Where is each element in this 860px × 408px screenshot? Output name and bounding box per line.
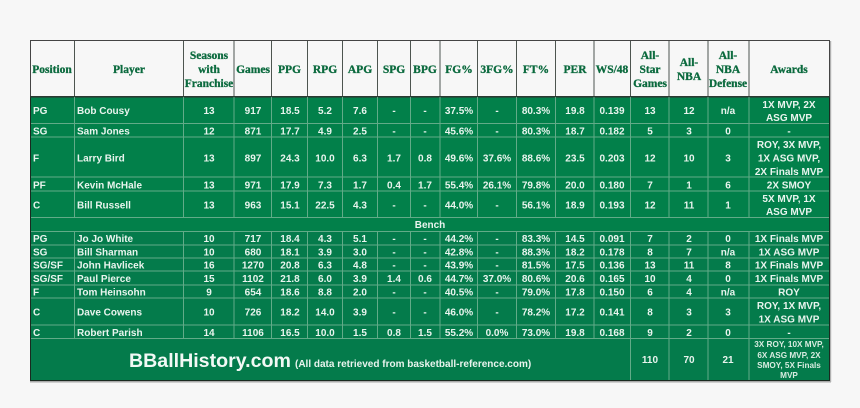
footer: totals: SMOY, 5X Finals	[757, 361, 821, 370]
header row: All-	[680, 57, 698, 69]
row: Larry Bird: 1.7	[387, 154, 401, 164]
footer: totals	[642, 340, 824, 380]
row: Sam Jones: 80.3%	[522, 126, 550, 138]
row: Jo Jo White: 0.091	[599, 234, 625, 245]
row: Dave Cowens: Dave Cowens	[77, 308, 142, 318]
row: Tom Heinsohn: 40.5%	[445, 288, 473, 298]
row: Tom Heinsohn: -	[423, 288, 427, 298]
row: Robert Parish: 0.0%	[486, 328, 509, 339]
row: Dave Cowens	[33, 301, 821, 326]
row: Sam Jones: -	[423, 126, 427, 138]
row: Dave Cowens: 18.2	[280, 308, 300, 318]
header row: Games	[236, 64, 270, 76]
row: Robert Parish: 1.5	[353, 328, 367, 339]
row: Bob Cousy: 13	[644, 106, 656, 117]
header row: Player	[113, 64, 145, 76]
row: John Havlicek: John Havlicek	[77, 260, 145, 272]
row: Jo Jo White: 18.4	[280, 234, 300, 245]
header row: with	[198, 64, 220, 76]
header row: BPG	[413, 64, 437, 76]
row: John Havlicek: 0.136	[599, 260, 625, 272]
row: Bob Cousy: 0.139	[599, 106, 625, 117]
row: Larry Bird: 24.3	[280, 154, 300, 164]
row: Larry Bird: 88.6%	[522, 154, 550, 164]
row: Robert Parish: 73.0%	[522, 328, 550, 339]
row: Kevin McHale: 20.0	[565, 180, 585, 192]
row: Paul Pierce: 6.0	[318, 274, 332, 285]
footer: totals: 21	[722, 355, 734, 366]
row: Larry Bird: 10	[683, 154, 695, 164]
row: Bill Sharman: 8	[647, 248, 653, 258]
header row: PPG	[278, 64, 301, 76]
table header band	[30, 40, 830, 96]
row: Robert Parish: 2	[686, 328, 692, 339]
header row: PER	[564, 64, 587, 76]
row: Bob Cousy: 1X MVP, 2X	[762, 100, 816, 111]
row: Robert Parish: 14	[203, 328, 215, 339]
row: Bob Cousy: -	[495, 106, 499, 117]
row: Paul Pierce: 10	[644, 274, 656, 285]
row: Bob Cousy: 19.8	[565, 106, 585, 117]
row: Bill Russell	[33, 194, 816, 218]
header row: APG	[348, 64, 372, 76]
row: Bill Russell: C	[33, 200, 40, 212]
row: Tom Heinsohn: n/a	[721, 288, 736, 298]
row: Jo Jo White: -	[392, 234, 396, 245]
row: Sam Jones: 5	[647, 126, 653, 138]
row: Dave Cowens: 46.0%	[445, 308, 473, 318]
row: Bill Russell: 13	[203, 200, 215, 212]
row: Dave Cowens: 78.2%	[522, 308, 550, 318]
row: Sam Jones: 17.7	[280, 126, 300, 138]
row: Sam Jones: -	[495, 126, 499, 138]
header row	[32, 50, 808, 90]
row: Bill Sharman: 1X ASG MVP	[759, 248, 820, 258]
row: Bob Cousy	[33, 100, 816, 124]
header row: Position	[32, 64, 72, 76]
row: Bill Sharman: 3.0	[353, 248, 367, 258]
row: Bill Sharman: 10	[203, 248, 215, 258]
row: Jo Jo White: 7	[647, 234, 653, 245]
row: Kevin McHale: 2X SMOY	[767, 180, 812, 192]
row: Dave Cowens: 8	[647, 308, 653, 318]
row: Jo Jo White: 83.3%	[522, 234, 550, 245]
row: Sam Jones: 45.6%	[445, 126, 473, 138]
row: Paul Pierce: 44.7%	[445, 274, 473, 285]
row: Jo Jo White: 1X Finals MVP	[755, 234, 824, 245]
row: Tom Heinsohn: 6	[647, 288, 653, 298]
row: Paul Pierce: 4	[686, 274, 692, 285]
row: Tom Heinsohn: 17.8	[565, 288, 585, 298]
row: Paul Pierce: 3.9	[353, 274, 367, 285]
row: John Havlicek: 17.5	[565, 260, 585, 272]
row: Kevin McHale: 7.3	[318, 180, 332, 192]
row: Bob Cousy: n/a	[721, 106, 736, 117]
row: Larry Bird: Larry Bird	[77, 154, 125, 164]
row: Bill Sharman: 18.1	[280, 248, 300, 258]
header row: Games	[633, 78, 667, 90]
row: Jo Jo White: -	[495, 234, 499, 245]
row: Sam Jones: 3	[686, 126, 692, 138]
row: Paul Pierce: 1102	[242, 274, 264, 285]
row: Robert Parish: 0.8	[387, 328, 401, 339]
row: Bill Russell: -	[392, 200, 396, 212]
footer: site name and data source	[129, 350, 531, 372]
row: Kevin McHale: 7	[647, 180, 653, 192]
section label: Bench: Bench	[415, 220, 445, 231]
row: Dave Cowens: ROY, 1X MVP,	[757, 301, 821, 312]
row: Tom Heinsohn: 18.6	[280, 288, 300, 298]
row: Dave Cowens: 3	[725, 308, 731, 318]
row: Paul Pierce: 0.6	[418, 274, 432, 285]
row: Robert Parish: 19.8	[565, 328, 585, 339]
row: Sam Jones: 871	[245, 126, 262, 138]
row: Bob Cousy: 917	[245, 106, 262, 117]
row: Paul Pierce: 0	[725, 274, 731, 285]
header row: All-	[719, 50, 737, 62]
row: Larry Bird: 897	[245, 154, 262, 164]
row: Jo Jo White: -	[423, 234, 427, 245]
header row: NBA	[716, 64, 741, 76]
row: Bob Cousy: 7.6	[353, 106, 367, 117]
row: Tom Heinsohn: 9	[206, 288, 212, 298]
row: Bill Russell: 5X MVP, 1X	[762, 194, 816, 205]
row: Larry Bird: 10.0	[315, 154, 335, 164]
row: Dave Cowens: 17.2	[565, 308, 585, 318]
row: Larry Bird: 12	[644, 154, 656, 164]
header row: 3FG%	[480, 64, 514, 76]
header row: NBA	[677, 71, 702, 83]
row: John Havlicek: 11	[684, 260, 695, 272]
row: John Havlicek: 4.8	[353, 260, 367, 272]
row: John Havlicek: -	[423, 260, 427, 272]
row: Bill Russell: 15.1	[280, 200, 300, 212]
row: John Havlicek: 8	[725, 260, 731, 272]
row: John Havlicek: 13	[644, 260, 656, 272]
row: Robert Parish: 10.0	[315, 328, 335, 339]
row: Paul Pierce: 1.4	[387, 274, 401, 285]
row: Robert Parish: Robert Parish	[77, 328, 143, 339]
header row: All-	[641, 50, 659, 62]
row: Bob Cousy: 13	[203, 106, 215, 117]
row: Kevin McHale: 13	[203, 180, 215, 192]
row: Kevin McHale: 1.7	[353, 180, 367, 192]
row: Larry Bird: 23.5	[565, 154, 585, 164]
row: Tom Heinsohn: -	[495, 288, 499, 298]
row: Tom Heinsohn: 2.0	[353, 288, 367, 298]
row: Bill Russell: 44.0%	[445, 200, 473, 212]
row: Kevin McHale: 6	[725, 180, 731, 192]
row: Bob Cousy: ASG MVP	[766, 113, 812, 124]
row: Jo Jo White: 4.3	[318, 234, 332, 245]
row: John Havlicek: -	[392, 260, 396, 272]
row: Larry Bird: 3	[725, 154, 731, 164]
row: Bill Sharman: 0.178	[599, 248, 625, 258]
row: Bill Russell: ASG MVP	[766, 207, 812, 218]
row: Jo Jo White: 10	[203, 234, 215, 245]
row: Bill Russell: 56.1%	[522, 200, 550, 212]
row: Larry Bird: 13	[203, 154, 215, 164]
row: Tom Heinsohn: F	[33, 288, 39, 298]
header row: SPG	[383, 64, 405, 76]
row: Dave Cowens: 1X ASG MVP	[759, 314, 820, 326]
row: Bob Cousy: Bob Cousy	[77, 106, 130, 117]
row: Tom Heinsohn: 4	[686, 288, 692, 298]
row: Bill Sharman: 7	[686, 248, 692, 258]
row: Kevin McHale: Kevin McHale	[77, 180, 142, 192]
row: Bill Russell: 18.9	[565, 200, 585, 212]
row: Paul Pierce: 0.165	[599, 274, 625, 285]
row: Bill Sharman: 42.8%	[445, 248, 473, 258]
row: Larry Bird: 49.6%	[445, 154, 473, 164]
row: Bob Cousy: -	[392, 106, 396, 117]
footer: totals: 110	[642, 355, 659, 366]
row: Bill Sharman: -	[495, 248, 499, 258]
row: Kevin McHale: PF	[33, 180, 46, 192]
row: Tom Heinsohn: 8.8	[318, 288, 332, 298]
row: Jo Jo White: 5.1	[353, 234, 367, 245]
row: Robert Parish: -	[787, 328, 791, 339]
row: Robert Parish: 0	[725, 328, 731, 339]
row: Kevin McHale	[33, 180, 812, 192]
row: Bill Russell: Bill Russell	[77, 200, 131, 212]
row: John Havlicek: 1X Finals MVP	[755, 260, 824, 272]
row: Kevin McHale: 79.8%	[522, 180, 550, 192]
row: Kevin McHale: 55.4%	[445, 180, 473, 192]
row: Sam Jones: 0	[725, 126, 731, 138]
row: Jo Jo White: 0	[725, 234, 731, 245]
row: Jo Jo White: Jo Jo White	[77, 234, 134, 245]
row: Robert Parish: 55.2%	[445, 328, 473, 339]
header row: FG%	[445, 64, 473, 76]
row: Kevin McHale: 1.7	[418, 180, 432, 192]
row: Dave Cowens: 0.141	[599, 308, 625, 318]
row: Bill Sharman: -	[392, 248, 396, 258]
row: Sam Jones: Sam Jones	[77, 126, 130, 138]
row: John Havlicek: 16	[203, 260, 215, 272]
row: Kevin McHale: 17.9	[280, 180, 300, 192]
row: Jo Jo White: PG	[33, 234, 48, 245]
row: Bob Cousy: 37.5%	[445, 106, 473, 117]
row: Dave Cowens: 14.0	[315, 308, 335, 318]
row: Paul Pierce: 15	[203, 274, 215, 285]
row: Bill Russell: -	[495, 200, 499, 212]
row: Bill Sharman	[33, 248, 820, 258]
row: Jo Jo White	[33, 234, 824, 245]
row: Kevin McHale: 971	[245, 180, 262, 192]
row: John Havlicek: 1270	[242, 260, 265, 272]
row: Dave Cowens: -	[423, 308, 427, 318]
row: Bob Cousy: -	[423, 106, 427, 117]
row: Tom Heinsohn: Tom Heinsohn	[77, 288, 146, 298]
row: Paul Pierce: 20.6	[565, 274, 585, 285]
row: Robert Parish	[33, 328, 791, 339]
row: Bob Cousy: 80.3%	[522, 106, 550, 117]
row: Larry Bird: 37.6%	[483, 154, 511, 164]
row: Sam Jones: 4.9	[318, 126, 332, 138]
row: Bill Russell: 963	[245, 200, 262, 212]
row: Tom Heinsohn: 79.0%	[522, 288, 550, 298]
row: Bob Cousy: 18.5	[280, 106, 300, 117]
row: Bill Sharman: Bill Sharman	[77, 248, 138, 258]
row: Larry Bird: ROY, 3X MVP,	[757, 140, 821, 151]
header row: Seasons	[190, 50, 229, 62]
row: Sam Jones: -	[787, 126, 791, 138]
row: Larry Bird: 6.3	[353, 154, 367, 164]
row: John Havlicek: 81.5%	[522, 260, 550, 272]
row: Jo Jo White: 717	[245, 234, 262, 245]
row: Bill Sharman: 88.3%	[522, 248, 550, 258]
footer: totals: 70	[683, 355, 695, 366]
row: Bill Sharman: 18.2	[565, 248, 585, 258]
row: Sam Jones: 18.7	[565, 126, 585, 138]
row: John Havlicek: 43.9%	[445, 260, 473, 272]
row: Tom Heinsohn: 0.150	[599, 288, 625, 298]
row: Robert Parish: 9	[647, 328, 653, 339]
row: Bill Sharman: -	[423, 248, 427, 258]
row: John Havlicek: 6.3	[318, 260, 332, 272]
row: Paul Pierce: 80.6%	[522, 274, 550, 285]
row: Bill Russell: 4.3	[353, 200, 367, 212]
header row: Awards	[770, 64, 808, 76]
footer: site name and data source: BBallHistory.com	[129, 350, 291, 372]
row: Robert Parish: 1106	[242, 328, 264, 339]
row: Larry Bird: F	[33, 154, 39, 164]
row: Paul Pierce: SG/SF	[33, 274, 63, 285]
row: Bill Russell: -	[423, 200, 427, 212]
row: Dave Cowens: 10	[203, 308, 215, 318]
row: Dave Cowens: -	[495, 308, 499, 318]
row: Paul Pierce: Paul Pierce	[77, 274, 131, 285]
row: Bob Cousy: 5.2	[318, 106, 332, 117]
row: Tom Heinsohn: 654	[245, 288, 262, 298]
footer: totals: 3X ROY, 10X MVP,	[754, 340, 824, 349]
row: Sam Jones: 2.5	[353, 126, 367, 138]
row: John Havlicek	[33, 260, 824, 272]
row: Bill Russell: 12	[644, 200, 656, 212]
row: Robert Parish: 16.5	[280, 328, 300, 339]
row: Bob Cousy: 12	[683, 106, 695, 117]
header row: WS/48	[596, 64, 629, 76]
row: Sam Jones: 12	[203, 126, 215, 138]
table body background	[30, 96, 830, 380]
header row: Defense	[709, 78, 747, 90]
row: Kevin McHale: 26.1%	[483, 180, 511, 192]
row: Bill Sharman: 680	[245, 248, 262, 258]
row: Bill Sharman: n/a	[721, 248, 736, 258]
row: Jo Jo White: 14.5	[565, 234, 585, 245]
row: Jo Jo White: 44.2%	[445, 234, 473, 245]
row: Bill Russell: 1	[725, 200, 731, 212]
row: Robert Parish: 1.5	[418, 328, 432, 339]
row: Dave Cowens: -	[392, 308, 396, 318]
footer: site name and data source: (All data retrieved from basketball-reference.com)	[295, 359, 531, 370]
row: Sam Jones	[33, 126, 791, 138]
row: Tom Heinsohn: -	[392, 288, 396, 298]
row: Kevin McHale: 0.180	[599, 180, 625, 192]
row: Kevin McHale: 0.4	[387, 180, 401, 192]
row: Bill Russell: 0.193	[599, 200, 625, 212]
row: John Havlicek: SG/SF	[33, 260, 63, 272]
footer: totals: MVP	[780, 371, 798, 380]
row: John Havlicek: -	[495, 260, 499, 272]
row: Bill Sharman: 3.9	[318, 248, 332, 258]
row: Jo Jo White: 2	[686, 234, 692, 245]
row: Dave Cowens: C	[33, 308, 40, 318]
row: Tom Heinsohn	[33, 288, 800, 298]
header row: Star	[639, 64, 661, 76]
row: Bill Russell: 22.5	[315, 200, 335, 212]
row: Kevin McHale: 1	[686, 180, 692, 192]
row: Sam Jones: SG	[33, 126, 48, 138]
row: Larry Bird: 0.203	[599, 154, 625, 164]
row: Sam Jones: -	[392, 126, 396, 138]
row: Larry Bird: 1X ASG MVP,	[758, 154, 820, 164]
row: Dave Cowens: 3	[686, 308, 692, 318]
row: Paul Pierce: 1X Finals MVP	[755, 274, 824, 285]
row: Bill Sharman: SG	[33, 248, 48, 258]
row: Larry Bird: 0.8	[418, 154, 432, 164]
row: Sam Jones: 0.182	[599, 126, 625, 138]
row: Paul Pierce	[33, 274, 824, 285]
row: Paul Pierce: 37.0%	[483, 274, 511, 285]
row: Larry Bird: 2X Finals MVP	[755, 167, 824, 178]
header row: FT%	[523, 64, 549, 76]
row: Larry Bird	[33, 140, 824, 178]
header row: Franchise	[185, 78, 233, 90]
row: Bill Russell: 11	[684, 200, 695, 212]
row: John Havlicek: 20.8	[280, 260, 300, 272]
header row: RPG	[313, 64, 337, 76]
row: Robert Parish: C	[33, 328, 40, 339]
row: Paul Pierce: 21.8	[280, 274, 300, 285]
row: Tom Heinsohn: ROY	[778, 288, 800, 298]
row: Robert Parish: 0.168	[599, 328, 625, 339]
row: Bob Cousy: PG	[33, 106, 48, 117]
row: Dave Cowens: 3.9	[353, 308, 367, 318]
footer: totals: 6X ASG MVP, 2X	[757, 351, 821, 360]
row: Dave Cowens: 726	[245, 308, 262, 318]
